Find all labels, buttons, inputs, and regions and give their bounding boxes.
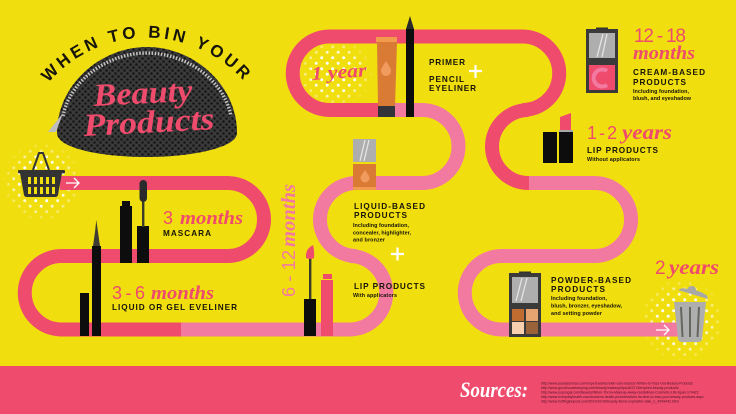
icon: liquid foundation [353, 139, 376, 190]
source links: http://www.huffingtonpost.com/2013/10/16/beauty-items-expiration-date_n_4043442.html [541, 400, 679, 404]
title: WHEN TO BIN YOUR [40, 26, 250, 80]
track: final section [465, 183, 680, 330]
text: 1-2 years lip products: Without applicators [587, 157, 640, 163]
text: liquid-based products: and bronzer [353, 238, 386, 244]
track: 3 to 6 month section [25, 183, 264, 330]
text: powder-based products: POWDER-BASED [551, 276, 631, 285]
text: 1-2 years lip products [587, 122, 672, 163]
text: 3 months mascara: MASCARA [163, 229, 211, 238]
text: lip products with applicators: LIP PRODUCTS [354, 282, 426, 291]
text: 12-18 months cream products: months [633, 43, 695, 64]
icon: powder compact [509, 272, 541, 337]
arrow: end [656, 325, 669, 335]
arrow: start [66, 178, 79, 188]
text: 6-12 months: 6 - 12 [279, 250, 299, 297]
text: 3-6 months eyeliner: 3 - 6 [112, 283, 145, 303]
text: 3 months mascara [163, 208, 243, 238]
footer band [0, 366, 736, 414]
text: 2 years: 2 [655, 258, 666, 279]
halftone: one year [300, 45, 372, 103]
heading: sources: Sources: [460, 377, 528, 402]
icon: liquid eyeliner [80, 220, 101, 336]
icon: shopping basket [18, 153, 65, 197]
icon: plus [469, 65, 482, 78]
text: 1-2 years lip products: 1 - 2 [587, 123, 617, 143]
text: 6-12 months [278, 184, 300, 297]
source links: http://www.paulaschoice.com/expert-advice/skin-care-basics/-/When-to-Toss-Out-Beauty-Products [541, 382, 693, 386]
text: 12-18 months cream products: PRODUCTS [633, 78, 687, 87]
text: liquid-based products [353, 202, 425, 244]
icon: cream compact [586, 28, 618, 93]
text: 3-6 months eyeliner: months [151, 283, 214, 304]
text: liquid-based products: PRODUCTS [354, 211, 408, 220]
makeup bag illustration [48, 44, 244, 160]
text: powder-based products [551, 276, 631, 317]
text: 1 year: 1 year [311, 60, 368, 85]
track: 6 to 12 month section [181, 110, 458, 330]
icon: trash can [674, 286, 708, 342]
text: 12-18 months cream products: blush, and eyeshadow [633, 96, 692, 102]
text: 2 years: years [667, 257, 719, 279]
text: 1-2 years lip products: years [620, 122, 672, 144]
halftone: basket [2, 144, 80, 219]
text: 12-18 months cream products [633, 26, 705, 102]
icon: primer tube [376, 37, 397, 117]
text: primer and pencil eyeliner: PRIMER [429, 58, 465, 67]
text: powder-based products: and setting powder [551, 311, 603, 317]
text: 2 years [655, 257, 719, 279]
text: 12-18 months cream products: CREAM-BASED [633, 68, 705, 77]
text: 3 months mascara: months [180, 208, 243, 229]
icon: plus [391, 248, 404, 260]
text: 3 months mascara: 3 [163, 208, 173, 228]
text: 12-18 months cream products: Including foundation, [633, 89, 690, 95]
text: liquid-based products: concealer, highlighter, [353, 230, 412, 236]
heading: Beauty Products: Beauty [91, 72, 194, 113]
text: 6-12 months: months [278, 184, 300, 247]
text: 12-18 months cream products: 12 - 18 [634, 26, 686, 47]
source links: http://www.popsugar.com/Beauty/When-Throw-Makeup-Away-Guidelines-Cosmetic-Life-Span-174422 [541, 390, 699, 394]
text: primer and pencil eyeliner: PENCIL [429, 75, 464, 84]
text: powder-based products: PRODUCTS [551, 285, 606, 294]
text: 1-2 years lip products: LIP PRODUCTS [587, 146, 659, 155]
text: lip products with applicators: With applicators [353, 293, 397, 299]
source links: http://www.everydayhealth.com/womens-health-pictures/when-its-time-to-toss-your-beauty-products.aspx [541, 395, 704, 399]
heading: Beauty Products [81, 72, 215, 143]
text: liquid-based products: LIQUID-BASED [354, 202, 425, 211]
text: 3-6 months eyeliner: LIQUID OR GEL EVELINER [112, 303, 237, 312]
icon: pencil eyeliner [406, 16, 414, 117]
text: liquid-based products: Including foundation, [353, 223, 410, 229]
text: powder-based products: blush, bronzer, eyeshadow, [551, 304, 622, 310]
winding track [25, 36, 680, 330]
halftone: trash can [640, 282, 723, 362]
source links: http://www.goodhousekeeping.com/beauty/makeup/tips/a22174/expired-beauty-products/ [541, 386, 679, 390]
text: primer and pencil eyeliner [429, 58, 476, 93]
icon: lip gloss [304, 245, 333, 336]
text: primer and pencil eyeliner: EYELINER [429, 84, 476, 93]
icon: lipstick [543, 113, 573, 163]
source links [541, 382, 704, 404]
text: powder-based products: Including foundation, [551, 296, 608, 302]
text: 3-6 months eyeliner [112, 283, 237, 312]
heading: Beauty Products: Products [81, 100, 215, 143]
icon: mascara [120, 180, 149, 263]
track: 1 year to 2 year section [293, 36, 559, 183]
text: lip products with applicators [353, 282, 426, 299]
